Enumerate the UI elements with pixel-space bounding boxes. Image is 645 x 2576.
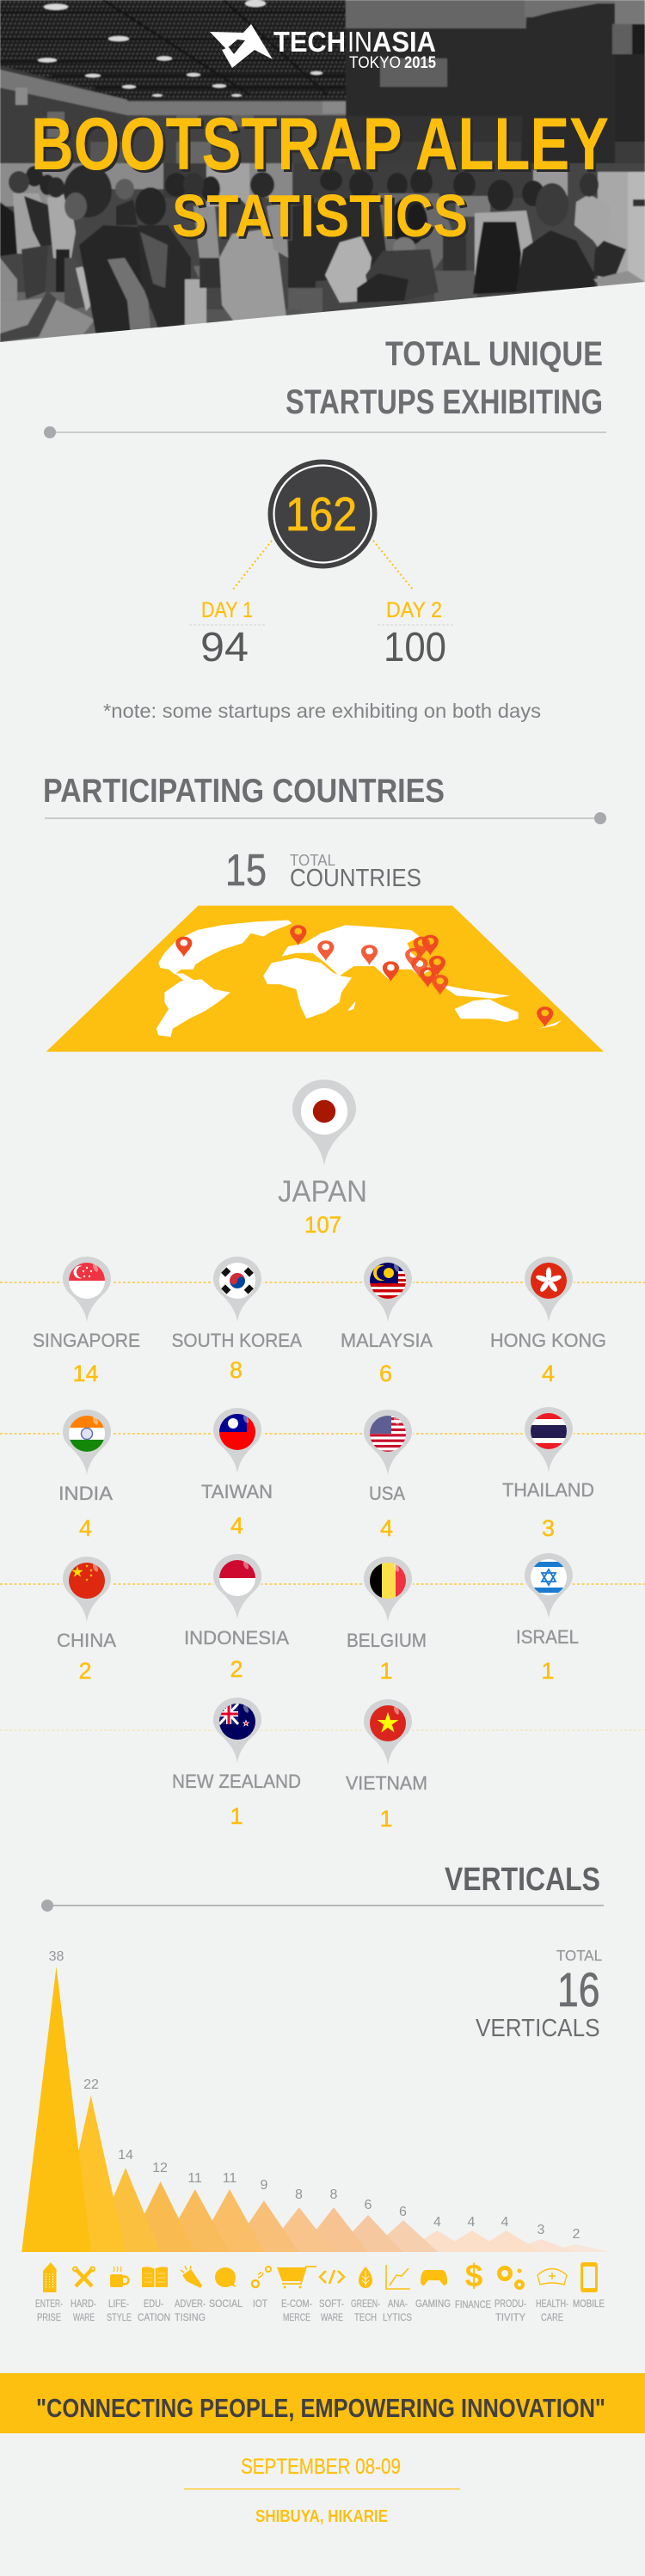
- country: hong kong: [490, 1257, 606, 1386]
- main title: STATISTICS: [172, 182, 468, 249]
- vertical labels: MERCE: [283, 2313, 310, 2323]
- chart value labels: 9: [261, 2178, 268, 2193]
- country: vietnam: 1: [379, 1806, 393, 1832]
- vertical labels: GAMING: [415, 2299, 451, 2310]
- japan count: 107: [304, 1212, 341, 1238]
- country: belgium: BELGIUM: [347, 1630, 427, 1651]
- total startups circle: [268, 459, 377, 569]
- country: usa: USA: [369, 1483, 405, 1504]
- day 1 stat: DAY 1: [201, 598, 253, 622]
- vertical labels: ANA-: [388, 2299, 408, 2310]
- country: new zealand: NEW ZEALAND: [172, 1771, 301, 1792]
- icon: analytics chart: [386, 2265, 410, 2289]
- dotted row lines: [0, 1282, 645, 1730]
- vertical labels: WARE: [321, 2313, 343, 2323]
- continents: [157, 920, 562, 1037]
- section divider: [44, 426, 606, 438]
- left group of visitors: [0, 202, 19, 256]
- logo wordmark: TOKYO: [349, 54, 401, 72]
- tagline band: [0, 2373, 645, 2433]
- vertical labels: GREEN-: [351, 2299, 380, 2310]
- location pins: [175, 925, 553, 1027]
- country: thailand: 3: [542, 1515, 555, 1541]
- hero banner: [0, 0, 645, 344]
- chart value labels: 4: [468, 2215, 476, 2230]
- crowd in the background: [26, 166, 544, 206]
- country: israel: 1: [541, 1658, 555, 1684]
- wall tiles: [0, 69, 128, 115]
- total verticals: [476, 1947, 602, 2042]
- right building: [346, 17, 529, 116]
- vertical labels: WARE: [73, 2313, 95, 2323]
- icon: enterprise building: [43, 2262, 57, 2292]
- country: taiwan: TAIWAN: [201, 1481, 273, 1502]
- country: china: 2: [78, 1658, 92, 1684]
- footer divider: [184, 2488, 460, 2490]
- total countries: COUNTRIES: [290, 865, 421, 892]
- chart value labels: 2: [573, 2227, 580, 2242]
- vertical labels: ADVER-: [175, 2299, 206, 2310]
- logo wordmark: TECH: [273, 26, 346, 58]
- heading: total unique startups exhibiting: TOTAL UNIQUE: [385, 335, 603, 373]
- country: indonesia: [184, 1554, 289, 1682]
- section divider: [45, 812, 606, 824]
- chart value labels: 14: [118, 2148, 133, 2163]
- japan label: JAPAN: [278, 1175, 367, 1208]
- icon: finance dollar: $: [465, 2258, 483, 2293]
- country: singapore: SINGAPORE: [33, 1330, 140, 1351]
- country: india: [58, 1410, 113, 1541]
- country: vietnam: [346, 1699, 427, 1832]
- chart value labels: 12: [152, 2161, 168, 2175]
- country: new zealand: 1: [230, 1803, 243, 1829]
- chart value labels: 4: [501, 2215, 509, 2230]
- icon: social bubble: [215, 2267, 236, 2287]
- main visitor with a backpack: [116, 199, 138, 225]
- icon: mobile phone: [580, 2262, 598, 2292]
- total verticals: 16: [557, 1962, 600, 2016]
- country: india: 4: [79, 1515, 92, 1541]
- icon: health care cap: [538, 2269, 567, 2285]
- icon: gaming controller: [421, 2270, 447, 2285]
- vertical labels: FINANCE: [455, 2300, 491, 2310]
- vertical labels: IOT: [253, 2299, 267, 2310]
- day 1 stat: 94: [200, 625, 249, 670]
- day 2 stat: DAY 2: [386, 598, 442, 622]
- day 1 stat: [189, 598, 267, 670]
- country: usa: 4: [380, 1515, 393, 1541]
- chart value labels: 38: [49, 1949, 64, 1964]
- main title: [31, 103, 609, 249]
- icon: productivity gears: [499, 2267, 523, 2288]
- right group of visitors: [325, 236, 372, 303]
- country: thailand: THAILAND: [502, 1479, 594, 1501]
- logo wordmark: IN: [347, 26, 372, 58]
- country: hong kong: HONG KONG: [490, 1330, 606, 1351]
- vertical labels: HEALTH-: [536, 2299, 568, 2310]
- icon: hardware tools: [73, 2267, 95, 2286]
- country: singapore: [33, 1257, 140, 1386]
- vertical labels: HARD-: [71, 2299, 96, 2310]
- chart value labels: 6: [399, 2205, 407, 2219]
- dotted connectors to days: [232, 541, 414, 590]
- icon: software code: [320, 2270, 344, 2284]
- japan pin: [292, 1080, 356, 1166]
- icon: e-commerce cart: [277, 2267, 316, 2288]
- country: south korea: SOUTH KOREA: [172, 1330, 302, 1351]
- country: indonesia: INDONESIA: [184, 1627, 289, 1649]
- country: india: INDIA: [58, 1483, 113, 1504]
- vertical labels: SOCIAL: [209, 2299, 243, 2310]
- country: taiwan: [201, 1408, 273, 1539]
- icon: advertising megaphone: [181, 2266, 202, 2288]
- note: *note: some startups are exhibiting on both days: [103, 700, 541, 722]
- event venue: SHIBUYA, HIKARIE: [255, 2506, 388, 2526]
- country: singapore: 14: [72, 1361, 99, 1386]
- total countries: 15: [225, 846, 267, 896]
- country: hong kong: 4: [542, 1361, 555, 1386]
- chart value labels: 6: [365, 2198, 372, 2212]
- total countries: TOTAL: [290, 852, 335, 869]
- total verticals: VERTICALS: [476, 2015, 600, 2042]
- event date: SEPTEMBER 08-09: [241, 2455, 401, 2479]
- chart value labels: 11: [187, 2171, 202, 2186]
- icon: green tech leaf: [359, 2267, 372, 2288]
- vertical triangle chart: [22, 1967, 611, 2252]
- world map: [46, 906, 604, 1052]
- logo mark: [210, 24, 273, 68]
- country: vietnam: VIETNAM: [346, 1772, 427, 1794]
- country: malaysia: [341, 1257, 433, 1386]
- vertical labels: TISING: [175, 2313, 206, 2323]
- icon: education open book: [142, 2267, 168, 2287]
- striped shirt visitor: [194, 206, 219, 258]
- country: thailand: [502, 1407, 594, 1541]
- vertical labels: PRISE: [37, 2313, 61, 2323]
- vertical labels: SOFT-: [319, 2299, 344, 2310]
- logo wordmark: ASIA: [372, 26, 436, 58]
- vertical labels: ENTER-: [35, 2299, 63, 2310]
- total verticals: TOTAL: [556, 1947, 602, 1964]
- back of the hall: [0, 163, 597, 311]
- country: malaysia: 6: [379, 1361, 392, 1386]
- vertical labels: CARE: [541, 2313, 563, 2323]
- country: china: [57, 1557, 116, 1684]
- country: israel: [516, 1553, 579, 1684]
- section divider: [41, 1900, 604, 1912]
- vertical labels: MOBILE: [573, 2299, 605, 2310]
- chart value labels: 8: [295, 2187, 303, 2202]
- logo wordmark: 2015: [404, 54, 436, 72]
- vertical labels: TIVITY: [495, 2313, 525, 2323]
- total startups circle: 162: [286, 487, 357, 541]
- country: china: CHINA: [57, 1630, 116, 1651]
- vertical labels: PRODU-: [494, 2299, 526, 2310]
- logo wordmark: [273, 26, 436, 72]
- hero photo of the exhibition hall: [0, 0, 645, 344]
- country: indonesia: 2: [230, 1656, 243, 1682]
- country: south korea: [172, 1257, 302, 1383]
- vertical labels: LYTICS: [383, 2313, 412, 2323]
- vertical labels: CATION: [138, 2313, 170, 2323]
- chart value labels: 3: [538, 2223, 545, 2237]
- chart value labels: [49, 1949, 580, 2242]
- country: south korea: 8: [230, 1357, 243, 1383]
- day 2 stat: [378, 598, 455, 670]
- icon: internet of things: [252, 2267, 271, 2287]
- chart value labels: 11: [223, 2171, 236, 2186]
- icon: lifestyle coffee cup: [110, 2267, 129, 2287]
- country: new zealand: [172, 1698, 301, 1829]
- country: usa: [364, 1410, 412, 1541]
- chart value labels: 8: [330, 2187, 338, 2202]
- vertical labels: STYLE: [107, 2313, 132, 2323]
- country: israel: ISRAEL: [516, 1626, 579, 1648]
- vertical labels: E-COM-: [281, 2299, 312, 2310]
- total countries: [225, 846, 421, 896]
- vertical labels: EDU-: [144, 2299, 163, 2310]
- heading: verticals: VERTICALS: [445, 1862, 600, 1898]
- country: belgium: 1: [379, 1658, 393, 1684]
- chart value labels: 4: [433, 2215, 441, 2230]
- country: malaysia: MALAYSIA: [341, 1330, 433, 1351]
- heading: participating countries: PARTICIPATING COUNTRIES: [43, 773, 445, 810]
- country: taiwan: 4: [230, 1513, 243, 1539]
- chart value labels: 22: [83, 2077, 99, 2092]
- country: belgium: [347, 1557, 427, 1684]
- heading: total unique startups exhibiting: [286, 335, 603, 421]
- vertical labels: [35, 2299, 605, 2323]
- vertical labels: LIFE-: [108, 2299, 129, 2310]
- day 2 stat: 100: [384, 625, 446, 670]
- vertical labels: TECH: [354, 2313, 377, 2323]
